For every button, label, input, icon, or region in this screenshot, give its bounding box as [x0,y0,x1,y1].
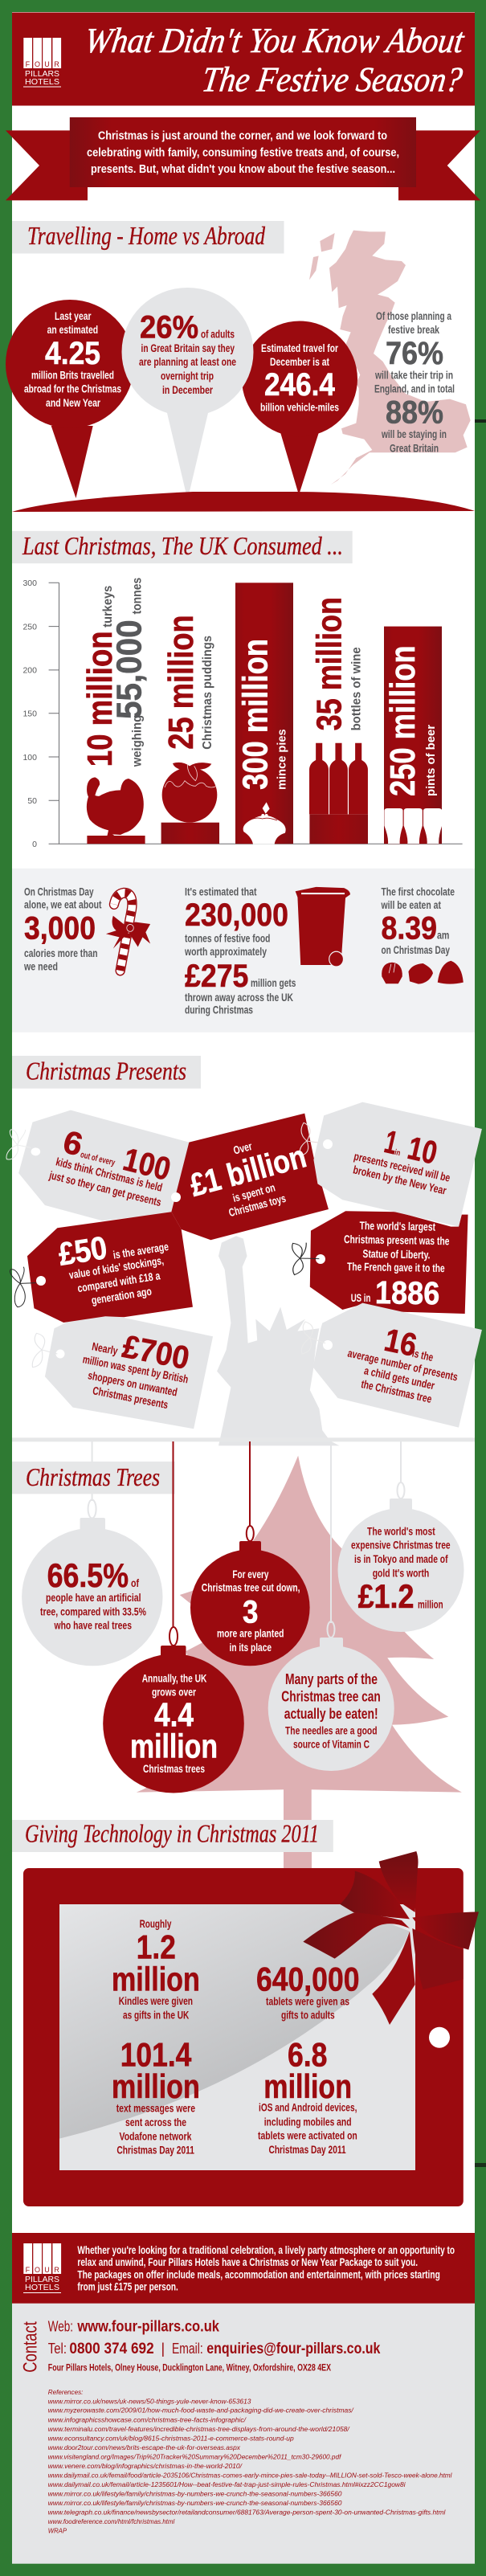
pin: 246.4 billion vehicle-miles [242,321,357,495]
panel: calories, waste and chocolate facts [12,869,475,1032]
tag: 700 million [32,1312,213,1429]
fact: first chocolate: on Christmas Day [381,943,450,956]
contact details: Four Pillars Hotels, Olney House, Ducklington Lane, Witney, Oxfordshire, OX28 4EX [48,2362,331,2374]
bow [301,1322,325,1354]
icon: chocolates [382,961,464,984]
pin: 26% of adults: in Great Britain say they [141,341,235,354]
contact details: Email: [172,2341,203,2357]
icon: turkey [87,777,144,836]
ornament: 3 more planted: 3 [243,1594,258,1629]
contact details: 0800 374 692 [69,2341,154,2357]
tag: 1 billion on toys [171,1114,329,1240]
footer logo: O [35,2266,40,2274]
stat: 1.2 million Kindles: as gifts in the UK [123,2008,189,2021]
ornament: edible tree [268,1621,394,1771]
tag: 1 billion on toys: £1 billion [186,1139,310,1204]
stat: 640,000 tablets: tablets were given as [266,1995,349,2008]
tag: 16 presents: 16 [382,1323,419,1364]
heading: presents: Christmas Presents [26,1056,186,1085]
references: www.myzerowaste.com/2009/01/how-much-food-waste-and-packaging-did-we-create-over-christmas/ [48,2406,354,2414]
stat: 640,000 tablets [256,1960,360,2022]
pin: 26% of adults: overnight trip [161,370,214,382]
ornament strings (red) [174,1441,250,1628]
tag: statue of liberty 1886: The French gave it to the [347,1260,445,1274]
tag: 16 presents: a child gets under [363,1364,436,1392]
statue of liberty silhouette [217,1236,339,1445]
bar: wine [309,597,368,844]
tag: 50 pound stockings: generation ago [91,1285,153,1306]
bar: mince pies [235,583,293,844]
map stats text: will be staying in [381,427,447,440]
section: Christmas trees [12,1441,464,1856]
ornament: 4.4 million trees: million [130,1728,218,1765]
pin: 4.25 million: abroad for the Christmas [24,382,121,395]
tag: 16 presents: the Christmas tree [360,1377,433,1405]
logo: Four Pillars Hotels: HOTELS [25,78,59,87]
ornament: 1.2 million pound tree: expensive Christmas tree [351,1539,451,1552]
contact details: | [161,2341,165,2357]
ornament: edible tree: source of Vitamin C [293,1738,370,1751]
fact: first chocolate: am [437,929,449,942]
references: www.mirror.co.uk/lifestyle/family/christmas-by-numbers-we-crunch-the-seasonal-numbers-366560 [48,2499,342,2507]
tablet screen [59,1904,415,2170]
footer logo: PILLARS [25,2275,59,2284]
pin: 26% of adults: 26% [140,309,198,345]
ornament: 66.5 percent: who have real trees [54,1619,132,1632]
red ground [12,492,475,512]
tag: 700 million: Nearly [91,1339,119,1357]
fact: food waste: million gets [251,976,296,989]
tag: 1 in 10: 10 [404,1131,440,1171]
map stats text: 76% [386,336,443,371]
section: Christmas presents [6,1056,482,1445]
home button [429,2027,450,2048]
section: travelling [6,221,475,512]
tag: 50 pound stockings: value of kids' stockings, [68,1253,165,1282]
tag: 16 presents: is the [411,1347,435,1364]
offer text: from just £175 per person. [77,2280,178,2293]
stat: 101.4 million texts: 101.4 [120,2036,192,2074]
map stats text: Great Britain [390,442,439,455]
pin: 4.25 million: an estimated [47,323,98,336]
pin: 246.4 billion vehicle-miles: Estimated travel for [261,341,338,354]
fact: food waste: £275 [185,959,248,994]
bow [6,1130,31,1159]
fact: 3,000 calories: On Christmas Day [24,885,94,898]
bar: beer: 250 million [383,645,423,796]
references: References: [48,2388,84,2396]
tag: 1 in 10 [313,1102,482,1227]
fact: 3,000 calories [23,885,102,972]
tag: statue of liberty 1886: 1886 [375,1275,440,1311]
bar: mince pies: mince pies [276,729,289,790]
tag: 1 in 10: 1 [381,1124,401,1161]
bar: wine: 35 million [309,597,349,730]
bar: turkeys: weighing [130,715,145,767]
map stats text: festive break [388,323,439,336]
bar: mince pies: 300 million [236,639,276,790]
stat: 1.2 million Kindles [112,1917,200,2021]
bar: puddings: 25 million [161,615,201,750]
pin: 26% of adults [122,288,254,500]
bar: beer [383,627,442,844]
pin: 4.25 million: and New Year [46,396,100,409]
fact: first chocolate: The first chocolate [381,885,455,898]
tag: 50 pound stockings: is the average [112,1240,169,1261]
stat: 6.8 million devices: 6.8 [288,2036,327,2074]
bow [300,1122,325,1155]
ornament: 66.5 percent: 66.5% [47,1556,129,1594]
tag: 50 pound stockings: compared with £18 a [76,1269,161,1294]
pin: 26% of adults: of adults [201,327,235,340]
fact: food waste: thrown away across the UK [185,991,293,1004]
fact: food waste: tonnes of festive food [185,932,270,945]
footer logo: F [26,2266,31,2274]
fact: 3,000 calories: 3,000 [24,911,96,947]
heading: travelling: Travelling - Home vs Abroad [27,221,266,250]
icon: pint glasses [384,808,442,844]
ornament: 1.2 million pound tree: is in Tokyo and made of [354,1552,448,1565]
references: www.mirror.co.uk/lifestyle/family/christmas-by-numbers-we-crunch-the-seasonal-numbers-366560 [48,2490,342,2498]
map stats text: 88% [386,395,443,431]
tag: 1 in 10: in [394,1148,401,1158]
intro text: presents. But, what didn't you know about the festive season... [91,163,395,176]
tablet [23,1868,464,2206]
fact: 3,000 calories: alone, we eat about [24,898,102,911]
pin: 4.25 million: Last year [55,309,92,322]
tag: statue of liberty 1886: Statue of Liberty. [362,1247,431,1261]
tag: 6 out of every 100: kids think Christmas is held [55,1155,164,1194]
fact: food waste: worth approximately [184,945,267,958]
stat: 6.8 million devices: Christmas Day 2011 [268,2143,346,2156]
christmas tree silhouette [137,1456,462,1856]
references: www.econsultancy.com/uk/blog/8615-christmas-2011-e-commerce-stats-round-up [48,2434,294,2442]
bar: turkeys: turkeys [101,586,115,628]
ornament: 1.2 million pound tree: gold It's worth [373,1567,429,1580]
ornament: 1.2 million pound tree: The world's most [367,1525,435,1538]
references: www.venere.com/blog/infographics/christmas-in-the-world-2010/ [48,2462,243,2470]
tag: 50 pound stockings [10,1212,193,1323]
ornament strings (grey) [92,1441,401,1623]
heading: trees: Christmas Trees [26,1462,160,1491]
ornament: 3 more planted: For every [232,1568,269,1580]
stat: 6.8 million devices: iOS and Android devices, [259,2101,357,2114]
map of Great Britain [309,231,471,485]
ornament: 66.5 percent: tree, compared with 33.5% [40,1605,146,1618]
intro ribbon banner [6,117,480,200]
heading: technology: Giving Technology in Christmas 2011 [25,1819,319,1848]
ornament: 3 more planted: in its place [230,1641,272,1654]
stat: 101.4 million texts: text messages were [116,2102,195,2115]
references: www.mirror.co.uk/news/uk-news/50-things-yule-never-know-653613 [48,2397,251,2405]
stat: 1.2 million Kindles: 1.2 [137,1928,176,1966]
logo: Four Pillars Hotels [23,38,61,87]
stat: 101.4 million texts: Vodafone network [119,2129,192,2142]
fact: 3,000 calories: calories more than [24,947,98,959]
pin: 4.25 million: million Brits travelled [31,368,114,381]
bar: puddings [161,615,219,844]
references [48,2388,453,2534]
tag: 16 presents [301,1303,482,1428]
tag: 1 in 10: broken by the New Year [352,1163,448,1197]
intro text: celebrating with family, consuming festive treats and, of course, [87,146,399,159]
footer: offer band [12,2233,475,2304]
tag: 700 million: million was spent by British [82,1352,190,1385]
axis labels: 50 [27,796,37,806]
logo: Four Pillars Hotels: R [54,60,59,68]
icon: wheelie bin [296,887,350,967]
stat: 6.8 million devices [258,2036,357,2156]
bow [10,1267,36,1307]
gift bow [303,1851,479,2025]
icon: candy cane [106,893,150,971]
contact details: enquiries@four-pillars.co.uk [206,2341,381,2357]
references: www.dailymail.co.uk/femail/article-1235601/How--beat-festive-fat-trap-just-simple-rules-Christmas.html#ixzz2CC1gow8i [48,2480,406,2488]
ornament: 66.5 percent: people have an artificial [46,1591,141,1604]
fact: food waste: It's estimated that [185,885,257,898]
pin: 26% of adults: are planning at least one [139,355,236,368]
references: www.dailymail.co.uk/femail/food/article-2035106/Christmas-comes-early-mince-pies-sale-today--MILLION-set-sold-Tesco-week-alone.html [48,2471,453,2479]
tag: 6 out of every 100: 100 [120,1142,174,1188]
fact: 3,000 calories: we need [23,959,58,972]
references: WRAP [48,2526,67,2534]
bow [292,1243,319,1275]
tag: 1 billion on toys: Over [232,1139,254,1157]
contact details: Web: [48,2319,73,2335]
ornament: 3 more planted: more are planted [217,1627,284,1640]
footer logo: HOTELS [25,2284,59,2292]
tag: 50 pound stockings: £50 [56,1230,109,1273]
tag: 6 out of every 100 [6,1110,189,1221]
ornament: 3 more planted [190,1526,310,1666]
ornament: 66.5 percent: of [131,1576,139,1589]
footer logo: U [44,2266,50,2274]
pin: 246.4 billion vehicle-miles: December is at [270,355,329,368]
ornament: 4.4 million trees: Annually, the UK [142,1671,206,1684]
logo: Four Pillars Hotels: F [26,60,31,68]
ornament: 4.4 million trees [103,1627,244,1793]
stat: 101.4 million texts: million [112,2067,200,2105]
bar: turkeys: 10 million [80,631,120,767]
bar: wine: bottles of wine [349,647,363,730]
ornament: 3 more planted: Christmas tree cut down, [202,1581,300,1594]
bar: puddings: Christmas puddings [201,636,214,750]
fact: food waste: during Christmas [185,1004,253,1016]
fact: first chocolate: 8.39 [381,911,437,947]
map stats text: will take their trip in [374,368,453,381]
pin: 4.25 million [6,300,134,498]
axis labels: 0 [32,840,37,849]
ornament: edible tree: Many parts of the [285,1670,378,1687]
bar: beer: pints of beer [424,725,438,796]
footer logo [23,2243,61,2293]
references: www.infographicsshowcase.com/christmas-tree-facts-infographic/ [48,2415,247,2423]
tag: statue of liberty 1886: US in [351,1291,370,1304]
ornament: 1.2 million pound tree: million [418,1598,443,1611]
bar: turkeys [80,578,149,844]
panel: contact [12,2304,475,2564]
tag: 700 million: shoppers on unwanted [87,1368,178,1399]
pin: 246.4 billion vehicle-miles: 246.4 [264,367,336,403]
stat: 1.2 million Kindles: Kindles were given [119,1994,193,2007]
ornament: edible tree: Christmas tree can [281,1688,381,1705]
contact details: Tel: [48,2341,67,2357]
ornament: 1.2 million pound tree: £1.2 [358,1577,414,1615]
heading: technology [12,1819,333,1852]
tag: 1 billion on toys: is spent on [231,1180,276,1204]
intro text [87,130,399,176]
references: www.foodreference.com/html/fchristmas.html [48,2517,175,2525]
tag: 6 out of every 100: just so they can get presents [47,1168,163,1208]
tag: 1 in 10: presents received will be [353,1150,451,1184]
axis labels: 250 [22,622,37,632]
stat: 101.4 million texts: Christmas Day 2011 [116,2144,194,2157]
axis labels: 100 [22,753,37,763]
bar: turkeys: tonnes [130,578,145,614]
header banner [12,13,475,106]
fact: first chocolate: will be eaten at [381,898,441,911]
stat: 640,000 tablets: gifts to adults [281,2009,335,2022]
ornament: edible tree: The needles are a good [285,1723,378,1736]
axis labels [22,579,37,849]
tag: statue of liberty 1886: Christmas present was the [344,1233,450,1247]
ornament: 4.4 million trees: grows over [152,1686,196,1699]
section: giving technology [12,1819,479,2206]
ornament: 4.4 million trees: Christmas trees [143,1762,205,1775]
icon: mince pie [243,802,286,844]
axis labels: 300 [22,579,37,588]
map stats text: England, and in total [374,382,455,395]
fact: first chocolate [381,885,455,956]
section: last Christmas the UK consumed [12,531,463,849]
tag: statue of liberty 1886: The world's largest [359,1219,435,1233]
tag: 6 out of every 100: out of every [80,1150,116,1168]
trunk stub [284,1852,312,1868]
logo: Four Pillars Hotels: PILLARS [25,70,59,79]
fact: food waste [184,885,296,1016]
contact label: Contact [19,2321,42,2373]
ornament: 4.4 million trees: 4.4 [154,1695,194,1733]
icon: Christmas pudding [162,763,217,823]
pin: 26% of adults: in December [162,383,213,396]
fact: food waste: 230,000 [185,898,288,933]
contact details: www.four-pillars.co.uk [77,2319,219,2336]
stat: 1.2 million Kindles: million [112,1960,200,1997]
stat: 101.4 million texts [112,2036,200,2157]
icon: wine bottles [309,743,368,814]
bow [32,1333,57,1368]
tag: 6 out of every 100: 6 [59,1124,86,1163]
footer logo: R [54,2266,59,2274]
stat: 101.4 million texts: sent across the [125,2116,186,2128]
tag: 700 million: Christmas presents [92,1384,169,1411]
intro text: Christmas is just around the corner, and we look forward to [98,130,387,143]
stat: 6.8 million devices: including mobiles and [264,2116,352,2128]
contact details [48,2319,381,2374]
pin: 4.25 million: 4.25 [45,336,100,371]
stat: 6.8 million devices: tablets were activated on [258,2129,357,2142]
axis labels: 200 [22,666,37,676]
map stats text [374,309,455,455]
references: www.visitengland.org/Images/Trip%20Tracker%20Summary%20December%2011_tcm30-29600.pdf [48,2452,342,2460]
tag: 1 billion on toys: Christmas toys [227,1192,288,1219]
chart axes [49,583,463,844]
bar chart [22,578,463,849]
stat: 6.8 million devices: million [263,2067,352,2105]
logo: Four Pillars Hotels: U [44,60,50,68]
ornament: edible tree: actually be eaten! [284,1705,378,1722]
logo: Four Pillars Hotels: O [35,60,40,68]
title [83,21,468,99]
stat: 1.2 million Kindles: Roughly [140,1917,172,1930]
references: www.door2tour.com/news/brits-escape-the-uk-for-overseas.aspx [48,2443,241,2451]
axis labels: 150 [22,709,37,719]
map stats text: Of those planning a [376,309,451,322]
stat: 640,000 tablets: 640,000 [256,1960,360,1997]
ornament: 1.2 million pound tree [337,1482,464,1632]
references: www.telegraph.co.uk/finance/newsbysector/retailandconsumer/6881763/Average-person-spent-30-on-unwanted-Christmas-gifts.html [48,2509,446,2517]
tag: statue of liberty 1886 [292,1211,468,1314]
bar: turkeys: 55,000 [109,619,149,719]
ornament: 66.5 percent [22,1499,162,1666]
references: www.terminalu.com/travel-features/incredible-christmas-tree-displays-from-around-the-world/21058/ [48,2425,350,2433]
offer text [77,2243,455,2293]
pin: 246.4 billion vehicle-miles: billion vehicle-miles [260,400,339,413]
heading: UK consumed: Last Christmas, The UK Consumed ... [22,531,343,560]
tag: 700 million: £700 [120,1329,192,1376]
